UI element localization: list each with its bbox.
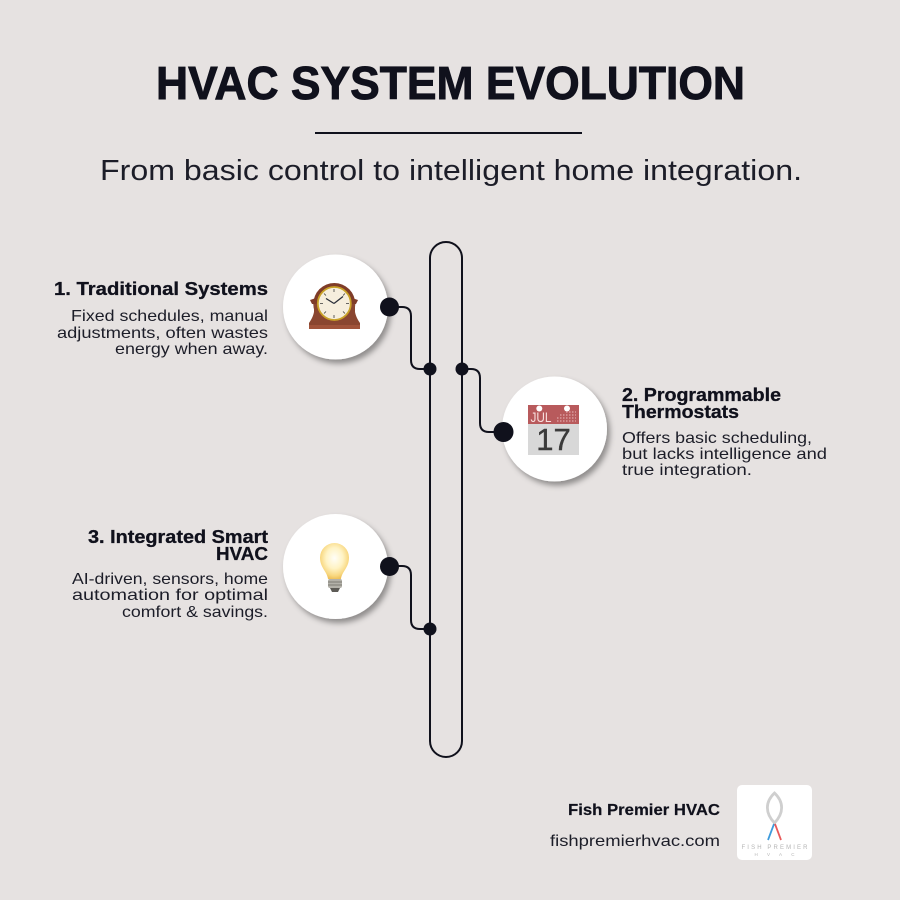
connector: step 1 <box>389 307 436 376</box>
central timeline track <box>430 242 462 757</box>
heading: step 1: 1. Traditional Systems <box>54 278 268 299</box>
text: step 3 description: AI-driven, sensors, home <box>72 571 268 588</box>
heading: step 2 <box>622 384 781 422</box>
text: step 2 description: true integration. <box>622 462 752 479</box>
title: HVAC SYSTEM EVOLUTION <box>156 57 745 109</box>
icon: calendar <box>502 376 607 482</box>
icon: calendar: 17 <box>536 422 571 457</box>
dot: step 2 <box>494 422 514 442</box>
subtitle: From basic control to intelligent home integration. <box>100 155 802 187</box>
dot: step 3 <box>380 557 399 576</box>
icon: light bulb <box>283 514 388 619</box>
text: step 1 description: adjustments, often wastes <box>57 325 268 342</box>
logo: FISH PREMIER <box>742 845 808 851</box>
panel: step 1 traditional systems <box>54 278 268 358</box>
heading: step 3 <box>88 526 268 564</box>
panel: step 3 integrated smart hvac <box>72 526 268 621</box>
logo <box>737 785 812 860</box>
text: step 3 description: comfort & savings. <box>122 604 268 621</box>
text: step 3 description <box>72 571 268 621</box>
title divider <box>315 132 582 134</box>
heading: step 3: 3. Integrated Smart <box>88 526 268 547</box>
panel: step 2 programmable thermostats <box>622 384 827 479</box>
footer website: fishpremierhvac.com <box>550 833 720 850</box>
connector: step 2 <box>456 362 504 432</box>
icon: calendar: JUL <box>530 409 552 425</box>
text: step 2 description: but lacks intelligence and <box>622 446 827 463</box>
heading: step 2: 2. Programmable <box>622 384 781 405</box>
icon: mantel clock <box>283 254 388 360</box>
text: step 2 description <box>622 430 827 479</box>
text: step 1 description: energy when away. <box>115 341 268 358</box>
heading: step 3: HVAC <box>216 543 268 564</box>
connector: step 3 <box>389 566 436 636</box>
logo: HVAC <box>754 852 795 857</box>
heading: step 2: Thermostats <box>622 401 739 422</box>
dot: step 1 <box>380 298 399 316</box>
text: step 2 description: Offers basic scheduling, <box>622 430 812 447</box>
text: step 1 description <box>57 308 268 358</box>
footer brand name: Fish Premier HVAC <box>568 802 720 819</box>
text: step 3 description: automation for optimal <box>72 587 268 604</box>
text: step 1 description: Fixed schedules, manual <box>71 308 268 325</box>
